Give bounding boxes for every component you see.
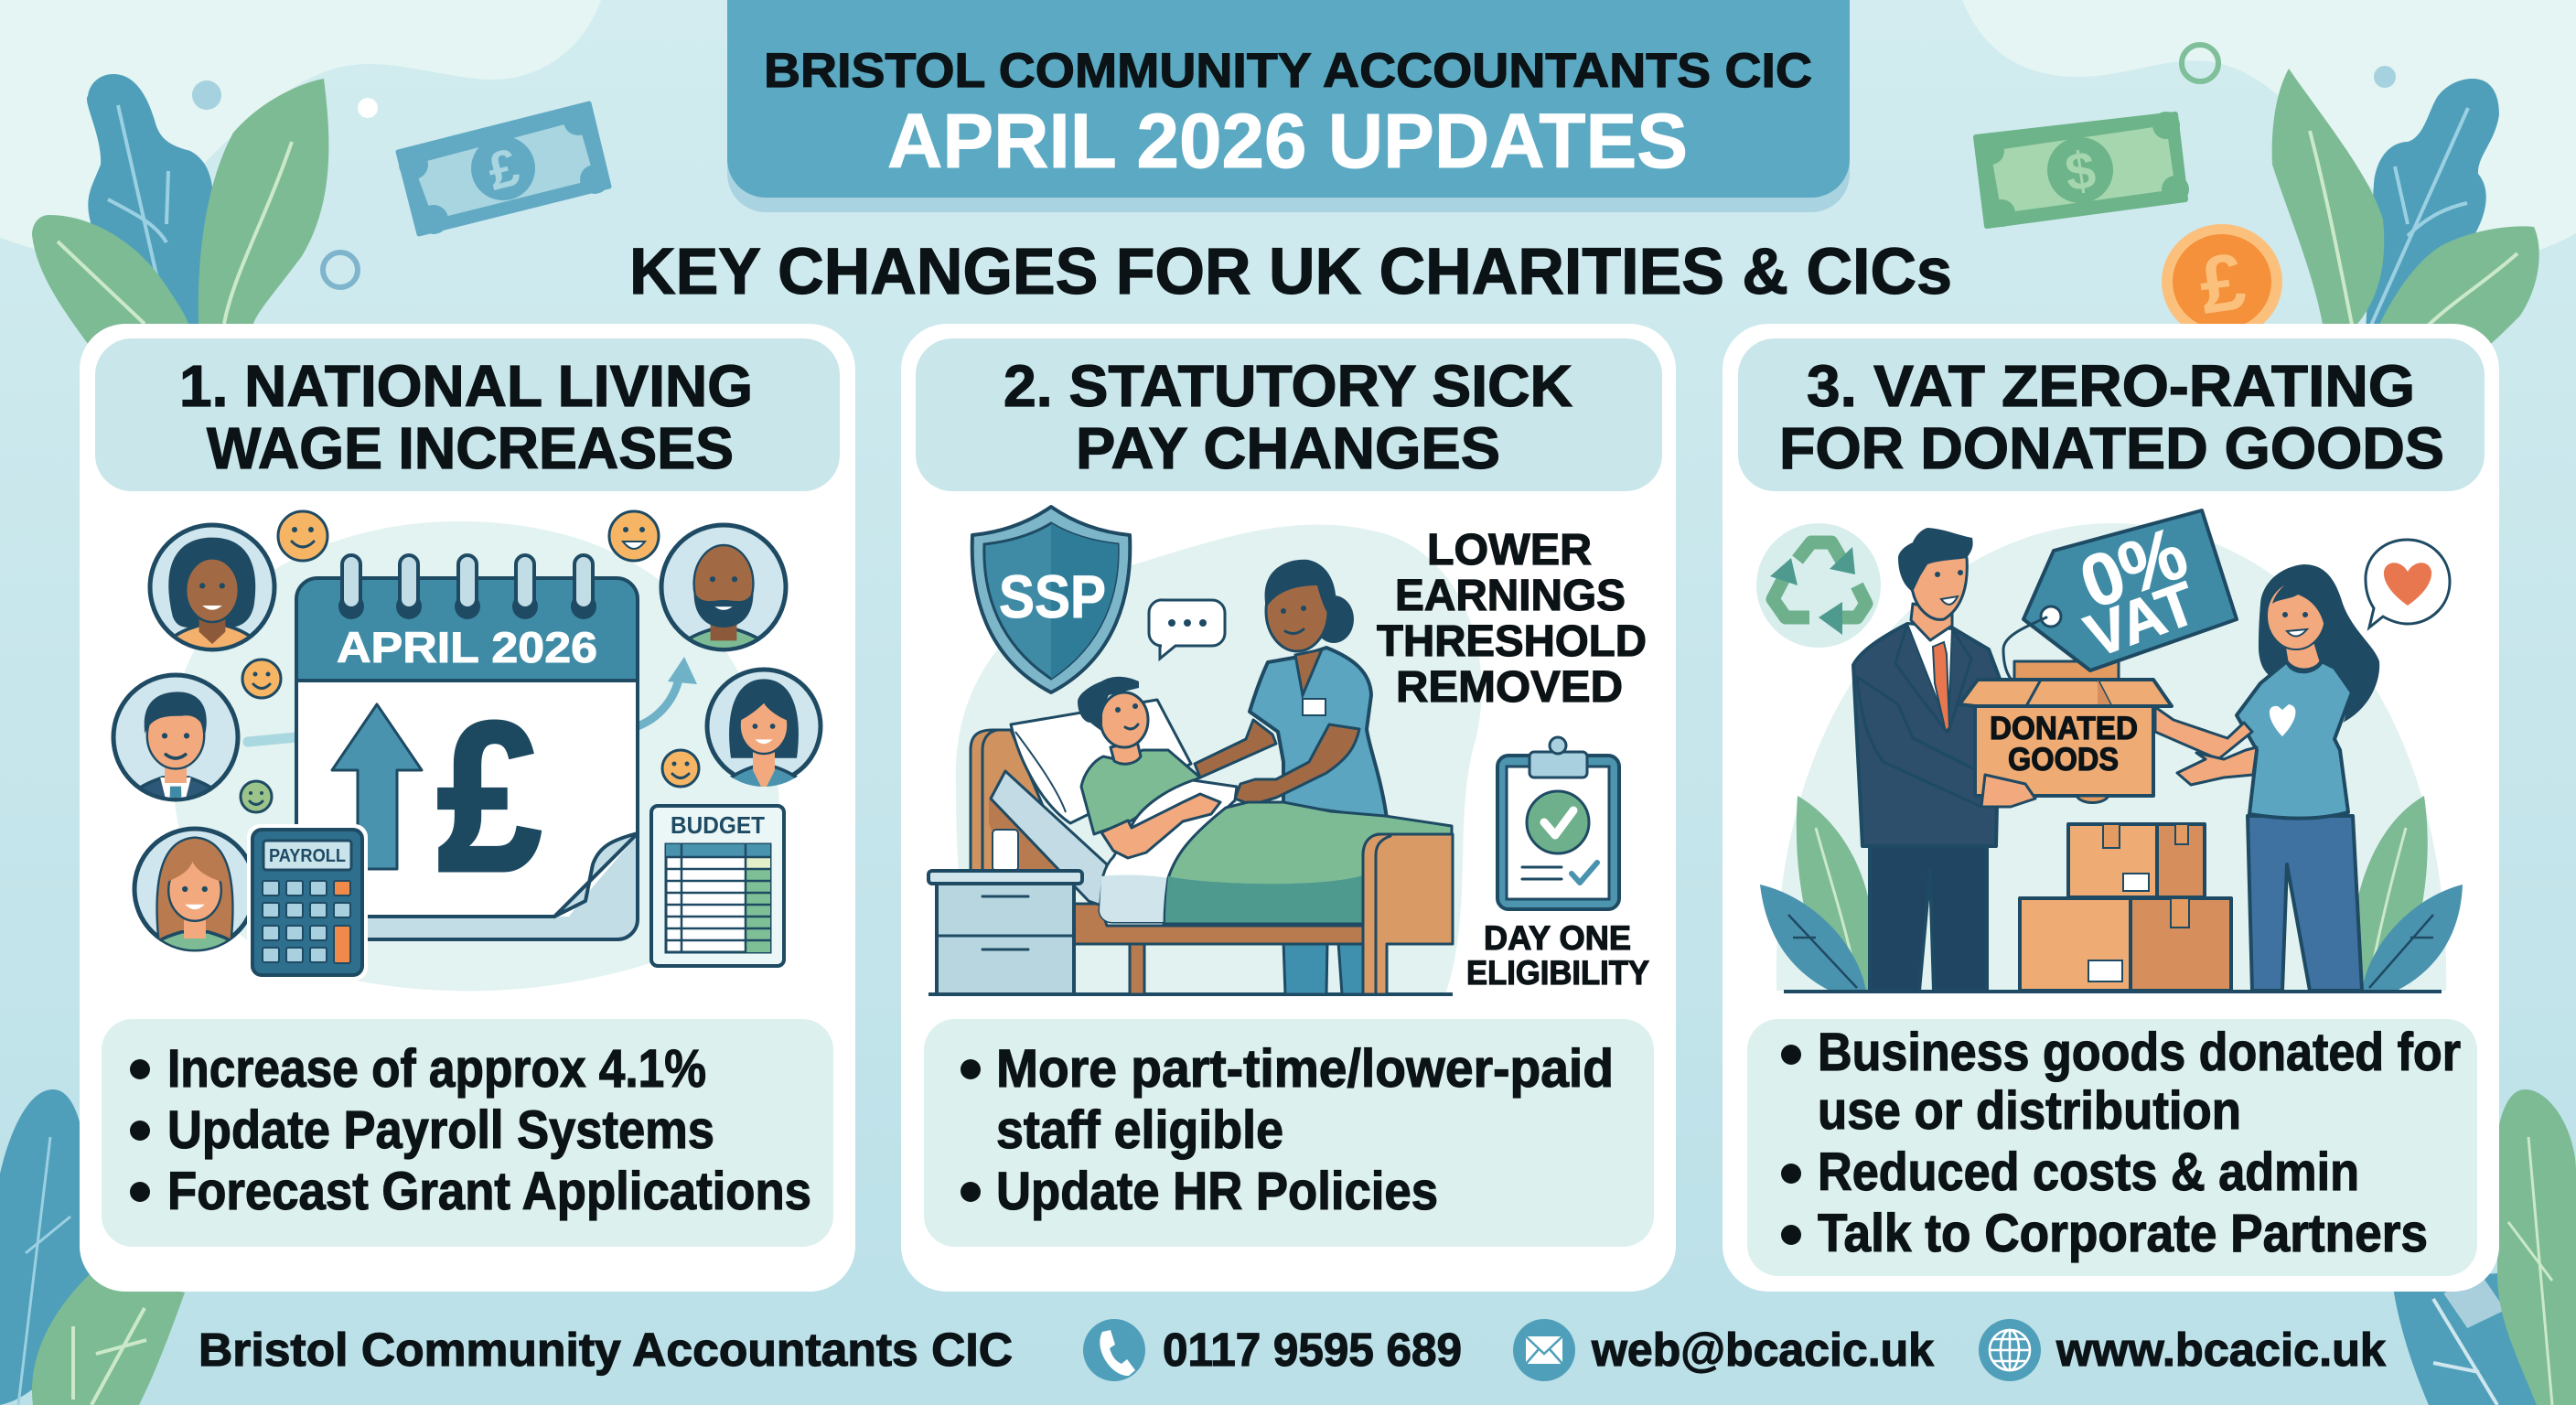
ground line bbox=[1784, 990, 2442, 993]
headboard bbox=[971, 730, 1070, 871]
arrow up bbox=[332, 704, 422, 869]
heading: national living wage: 1. NATIONAL LIVING bbox=[179, 353, 753, 419]
icon: pound banknote bbox=[398, 103, 609, 234]
illustration: bed and nurse bbox=[928, 507, 1649, 994]
box: donated goods bbox=[1959, 680, 2172, 807]
text: day one eligibility: ELIGIBILITY bbox=[1466, 954, 1649, 992]
blanket bbox=[1100, 780, 1453, 994]
floor line bbox=[928, 992, 1453, 996]
bed rail bbox=[1074, 904, 1363, 944]
man in suit bbox=[1853, 528, 2000, 991]
bullet panel: wage: Increase of approx 4.1% bbox=[167, 1039, 706, 1099]
icon: pound banknote: £ bbox=[482, 137, 525, 202]
subtitle: KEY CHANGES FOR UK CHARITIES & CICs bbox=[629, 236, 1952, 308]
bullet panel: wage: Update Payroll Systems bbox=[167, 1100, 714, 1160]
main title: APRIL 2026 UPDATES bbox=[887, 98, 1688, 184]
heading: VAT zero-rating: 3. VAT ZERO-RATING bbox=[1807, 353, 2415, 419]
heading: statutory sick pay bbox=[916, 338, 1662, 491]
leaves: bottom left bbox=[0, 1089, 185, 1405]
tag: 0% VAT: 0% bbox=[2070, 511, 2197, 624]
box: donated goods: GOODS bbox=[2008, 742, 2119, 778]
panel: statutory sick pay bbox=[901, 324, 1676, 1292]
person: man in suit bbox=[113, 675, 238, 821]
budget sheet bbox=[651, 806, 784, 966]
pound sign: £ bbox=[437, 679, 542, 916]
organisation name: BRISTOL COMMUNITY ACCOUNTANTS CIC bbox=[764, 44, 1812, 98]
box: donated goods: DONATED bbox=[1990, 711, 2138, 746]
person: woman bottom left bbox=[132, 827, 247, 951]
bullet panel: sick pay: staff eligible bbox=[996, 1100, 1283, 1160]
calculator: payroll bbox=[247, 824, 368, 981]
icon: recycling bbox=[1756, 523, 1881, 648]
panel: national living wage bbox=[80, 324, 855, 1292]
panel: VAT zero-rating bbox=[1723, 324, 2499, 1292]
patient bbox=[1078, 677, 1200, 834]
text: lower earnings threshold removed: THRESHOLD bbox=[1377, 617, 1647, 666]
footer: email: web@bcacic.uk bbox=[1591, 1324, 1935, 1376]
icon: pound coin bbox=[2162, 224, 2282, 339]
heading: statutory sick pay: 2. STATUTORY SICK bbox=[1004, 353, 1572, 419]
footer: phone: 0117 9595 689 bbox=[1163, 1324, 1462, 1376]
nightstand bbox=[928, 830, 1082, 994]
bed bbox=[971, 700, 1363, 994]
calendar label: APRIL 2026 bbox=[337, 623, 597, 671]
icon: SSP shield: SSP bbox=[999, 563, 1106, 630]
boxes: stacked bbox=[2020, 824, 2231, 991]
icon: email bbox=[1513, 1319, 1575, 1381]
speech bubble: heart bbox=[2366, 540, 2450, 627]
calculator: payroll: PAYROLL bbox=[269, 846, 346, 866]
decorative dots bbox=[192, 45, 2396, 287]
person: woman right bbox=[707, 670, 821, 803]
icon: phone bbox=[1083, 1319, 1145, 1381]
icon: clipboard bbox=[1497, 737, 1619, 909]
heading: VAT zero-rating: FOR DONATED GOODS bbox=[1779, 415, 2444, 481]
bullet panel: sick pay: Update HR Policies bbox=[996, 1162, 1438, 1221]
bullet panel: sick pay: More part-time/lower-paid bbox=[996, 1039, 1614, 1099]
icon: SSP shield bbox=[972, 507, 1130, 692]
person: woman top left bbox=[150, 525, 274, 671]
bullet panel: VAT: Business goods donated for bbox=[1818, 1023, 2461, 1082]
bullet panel: VAT: use or distribution bbox=[1818, 1081, 2241, 1141]
bullet panel: VAT bbox=[1747, 1019, 2477, 1276]
background blob: top right bbox=[1962, 0, 2576, 265]
heading: national living wage bbox=[95, 338, 840, 491]
mattress bbox=[991, 771, 1107, 906]
speech bubble bbox=[1149, 600, 1225, 659]
leaves: top left bbox=[32, 74, 328, 348]
person: bearded man bbox=[661, 525, 786, 671]
text: lower earnings threshold removed: LOWER bbox=[1427, 526, 1592, 574]
footer: organisation: Bristol Community Accountants CIC bbox=[199, 1324, 1013, 1376]
text: lower earnings threshold removed: REMOVED bbox=[1396, 663, 1623, 712]
text: day one eligibility: DAY ONE bbox=[1484, 919, 1631, 957]
bullet panel: VAT: Talk to Corporate Partners bbox=[1818, 1204, 2428, 1263]
footer bbox=[199, 1319, 2387, 1381]
icon: dollar banknote bbox=[1976, 112, 2189, 227]
icon: pound coin: £ bbox=[2194, 235, 2250, 331]
calendar bbox=[296, 555, 638, 939]
title banner bbox=[727, 0, 1850, 212]
icon: dollar banknote: $ bbox=[2062, 140, 2099, 203]
leaves bbox=[1760, 796, 2463, 991]
heading: national living wage: WAGE INCREASES bbox=[207, 415, 734, 481]
bullet panel: wage bbox=[102, 1019, 833, 1247]
footer: website: www.bcacic.uk bbox=[2055, 1324, 2387, 1376]
leaves: top right bbox=[2272, 69, 2539, 348]
footboard bbox=[1363, 834, 1453, 994]
illustration: donated goods handover bbox=[1756, 510, 2463, 992]
nurse bbox=[1195, 560, 1387, 994]
icon: globe bbox=[1979, 1319, 2041, 1381]
heading: VAT zero-rating bbox=[1738, 338, 2485, 491]
arrow: curved right bbox=[638, 657, 697, 726]
budget sheet: BUDGET bbox=[671, 811, 765, 839]
smiley icons bbox=[241, 511, 699, 812]
heading: statutory sick pay: PAY CHANGES bbox=[1076, 415, 1500, 481]
bullet panel: sick pay bbox=[924, 1019, 1654, 1247]
pillow bbox=[1011, 700, 1191, 823]
arrow: dash left bbox=[248, 737, 296, 742]
tag: 0% VAT: VAT bbox=[2077, 568, 2205, 670]
woman in teal shirt bbox=[2155, 564, 2379, 991]
tag: 0% VAT bbox=[2003, 510, 2237, 679]
text: lower earnings threshold removed bbox=[1377, 526, 1647, 712]
box: back bbox=[2014, 661, 2119, 681]
background blob: top left bbox=[0, 0, 601, 265]
text: lower earnings threshold removed: EARNINGS bbox=[1395, 572, 1626, 620]
text: day one eligibility bbox=[1466, 919, 1649, 992]
illustration: calendar and staff bbox=[113, 511, 821, 991]
bullet panel: wage: Forecast Grant Applications bbox=[167, 1162, 811, 1221]
leaves: bottom right bbox=[2392, 1089, 2576, 1405]
bullet panel: VAT: Reduced costs & admin bbox=[1818, 1142, 2359, 1202]
